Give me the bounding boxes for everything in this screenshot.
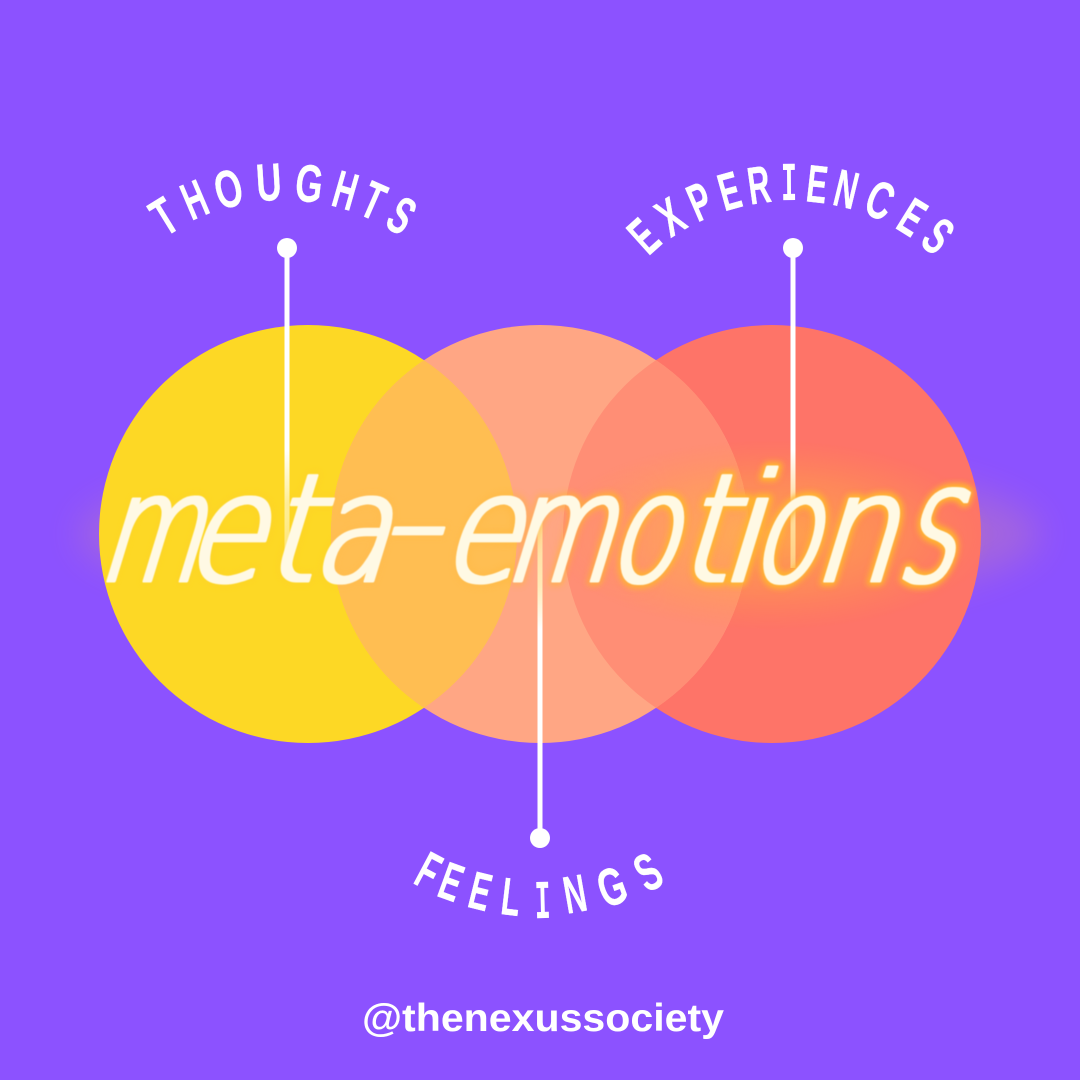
label: experiences: P <box>679 172 721 234</box>
circle: peach feelings <box>331 325 749 743</box>
neon title: meta-emotions: i <box>706 443 801 617</box>
label: thoughts: H <box>173 169 217 232</box>
label: thoughts: G <box>292 152 326 215</box>
neon title: meta-emotions: t <box>252 441 356 617</box>
neon title: meta-emotions: i <box>706 443 801 617</box>
neon title: meta-emotions: s <box>884 427 999 620</box>
connector: feelings <box>530 522 550 848</box>
neon title: meta-emotions: e <box>429 443 558 617</box>
neon title: meta-emotions: - <box>364 433 480 607</box>
overlap: peach and coral <box>563 360 746 708</box>
neon title: meta-emotions: m <box>493 442 651 617</box>
label: feelings: G <box>589 854 635 920</box>
neon title: meta-emotions: e <box>429 443 558 617</box>
neon title: meta-emotions: e <box>172 441 304 617</box>
glow outside circles <box>80 449 1040 619</box>
label: feelings: I <box>534 872 551 935</box>
connector: experiences <box>783 238 803 568</box>
neon title: meta-emotions: m <box>86 443 239 617</box>
circle: coral experiences <box>563 325 981 743</box>
neon title: meta-emotions: o <box>738 442 858 617</box>
label: experiences: I <box>781 154 797 217</box>
label: feelings: F <box>406 842 450 902</box>
neon halo on right circles <box>612 458 982 611</box>
circle: yellow thoughts <box>99 325 517 743</box>
label: experiences: S <box>910 207 965 266</box>
label: feelings: S <box>624 842 672 904</box>
neon title: meta-emotions: s <box>884 427 999 620</box>
neon title: meta-emotions <box>106 459 978 592</box>
label: experiences: E <box>803 155 830 216</box>
label: thoughts: O <box>208 156 249 221</box>
label: thoughts: S <box>377 185 426 247</box>
neon title: meta-emotions: m <box>86 443 239 617</box>
label: feelings <box>406 842 672 935</box>
handle: @thenexussociety: @thenexussociety <box>362 997 724 1040</box>
label: feelings: E <box>431 852 471 914</box>
label: feelings: N <box>559 864 591 926</box>
infographic canvas <box>76 163 1044 1039</box>
neon title: meta-emotions: o <box>738 442 858 617</box>
neon title: meta-emotions: t <box>666 441 770 617</box>
label: thoughts: H <box>326 160 364 223</box>
neon title: meta-emotions: a <box>299 443 428 617</box>
neon title: meta-emotions: t <box>252 441 356 617</box>
label: experiences: E <box>712 161 748 223</box>
label: feelings: E <box>463 861 497 923</box>
label: experiences <box>617 154 965 266</box>
neon title: meta-emotions: o <box>595 443 716 617</box>
neon title: meta-emotions: - <box>364 433 480 607</box>
label: experiences: E <box>617 208 672 266</box>
label: thoughts: T <box>352 171 394 233</box>
label: thoughts: U <box>254 151 283 213</box>
neon title: meta-emotions: o <box>595 443 716 617</box>
neon title: meta-emotions: t <box>666 441 770 617</box>
venn diagram <box>99 325 995 743</box>
label: experiences: N <box>828 159 864 222</box>
label: experiences: R <box>744 156 774 217</box>
label: experiences: X <box>646 187 696 248</box>
neon title: meta-emotions: n <box>801 441 935 617</box>
label: experiences: C <box>857 168 903 233</box>
neon title: meta-emotions: n <box>801 441 935 617</box>
neon title: meta-emotions: a <box>299 443 428 617</box>
label: feelings: L <box>498 868 524 928</box>
neon title: meta-emotions: m <box>493 442 651 617</box>
label: experiences: E <box>888 188 936 249</box>
overlap: yellow and peach <box>331 360 517 708</box>
neon title: meta-emotions: e <box>172 441 304 617</box>
connector: thoughts <box>277 238 297 575</box>
label: thoughts <box>141 151 426 248</box>
label: thoughts: T <box>141 187 189 248</box>
